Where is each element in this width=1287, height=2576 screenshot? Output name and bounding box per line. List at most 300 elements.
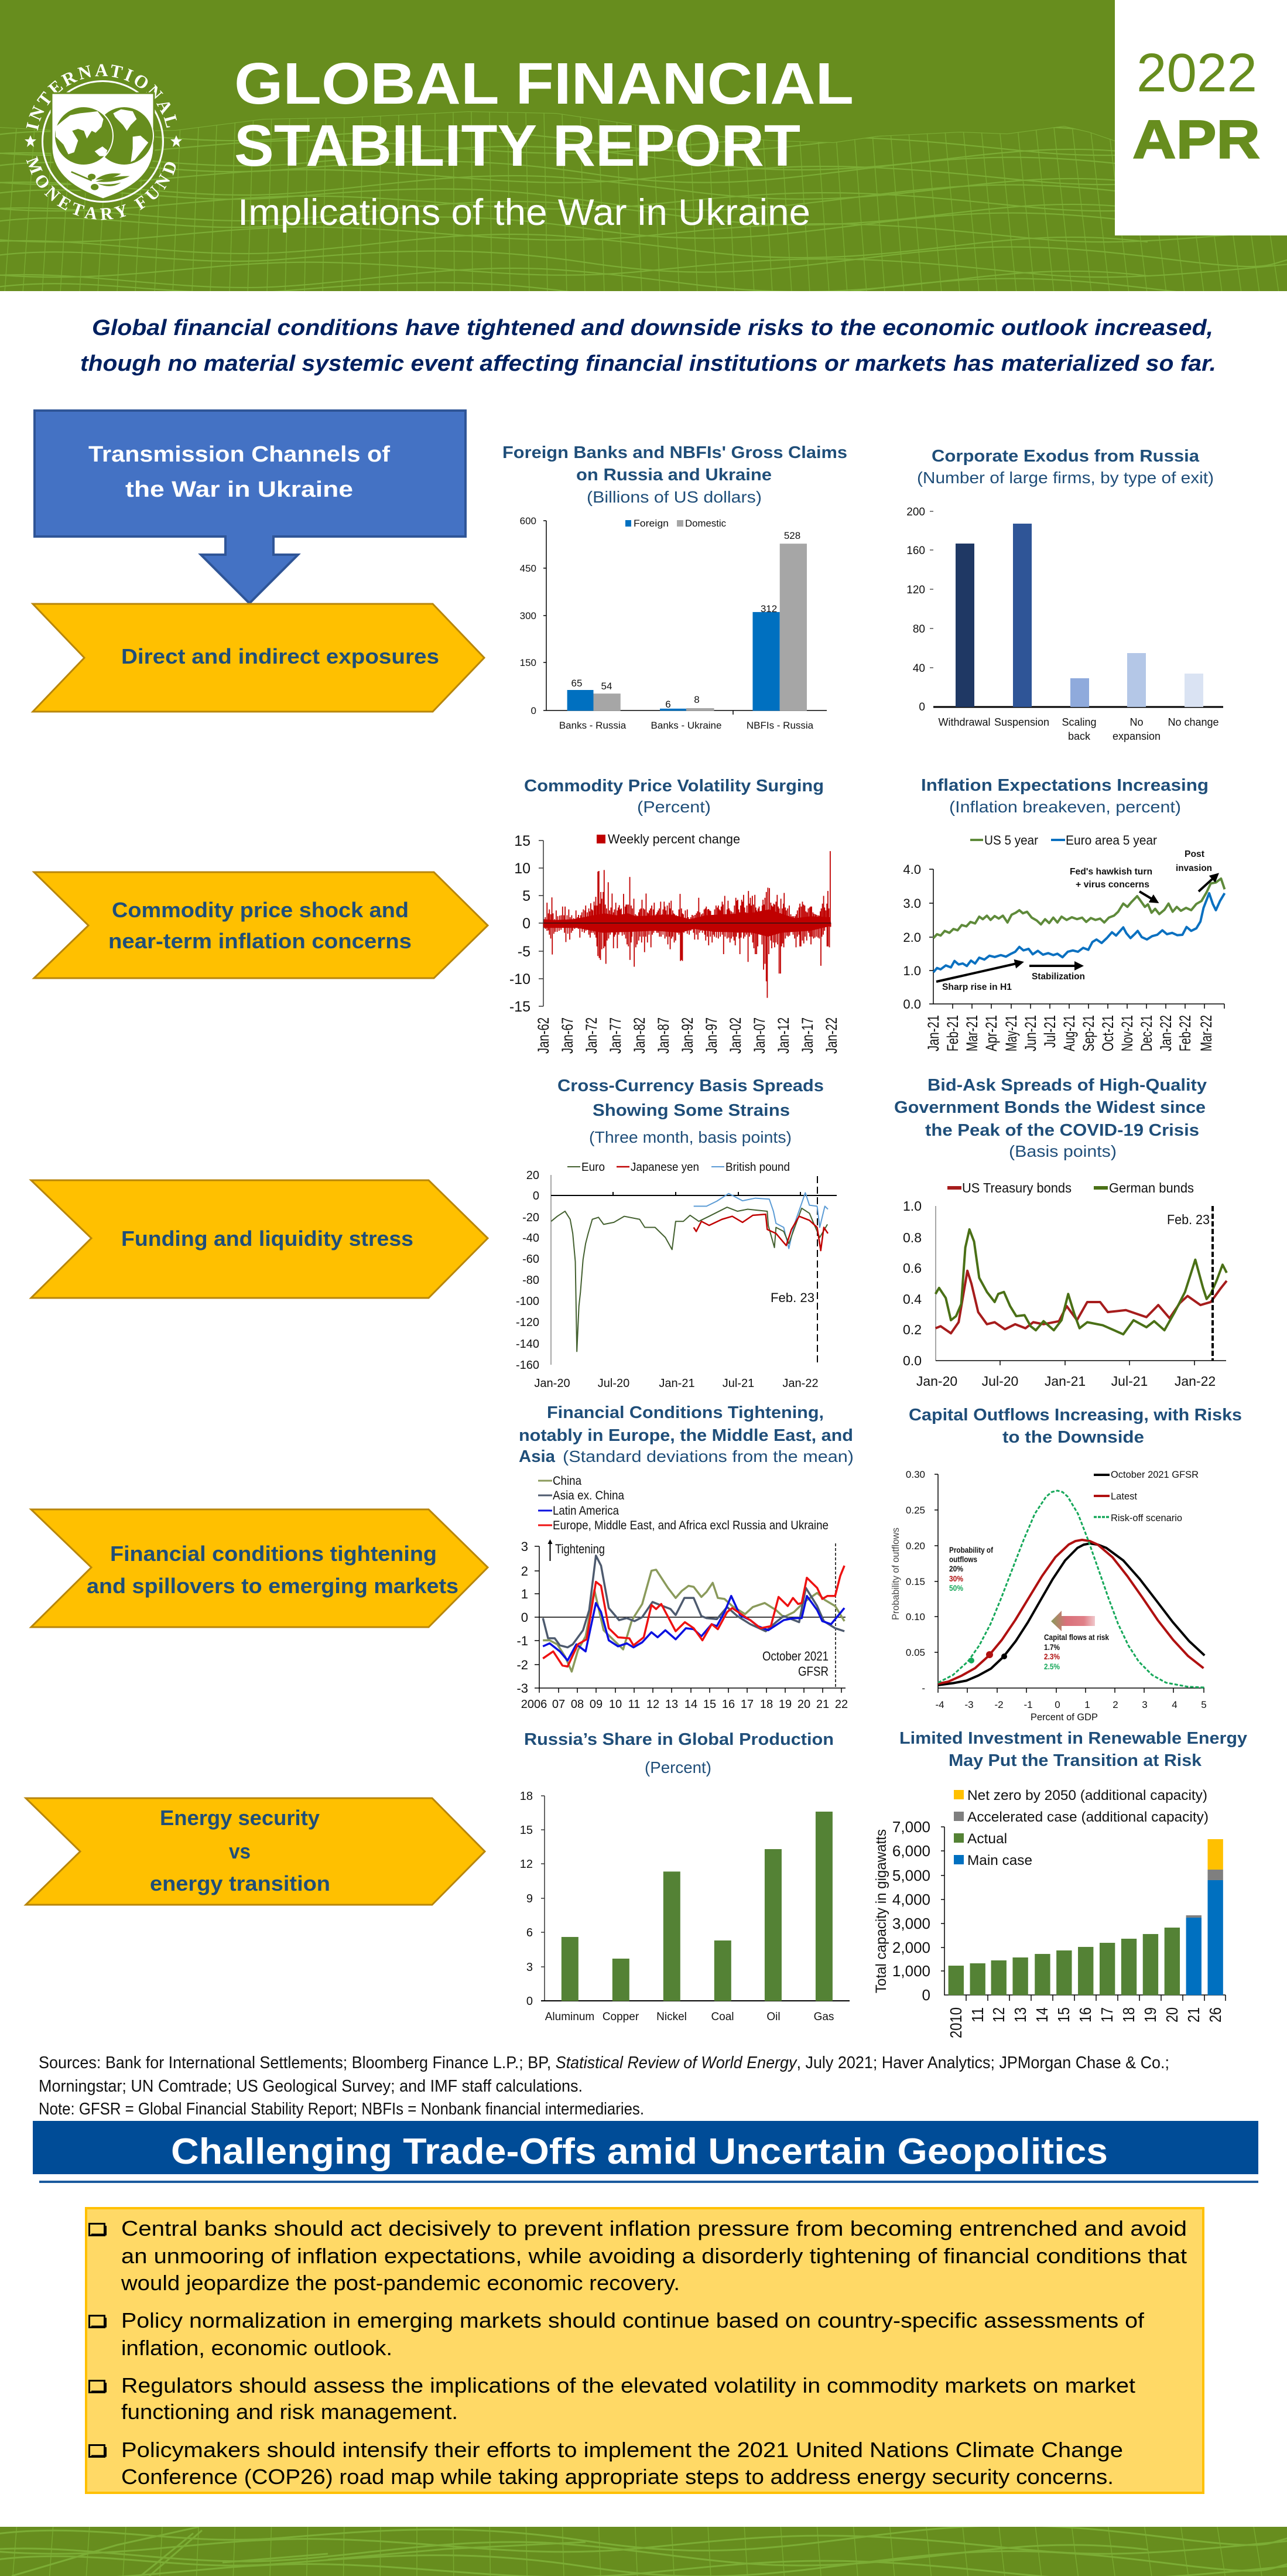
heading: Showing Some Strains — [593, 1101, 790, 1120]
annotations: Sharp rise in H1 — [942, 982, 1012, 992]
annotation: capital flows at risk — [1044, 1632, 1109, 1671]
axis labels: Jan-02 — [727, 1017, 744, 1054]
axis labels: Feb-22 — [1176, 1015, 1194, 1051]
heading — [519, 1403, 854, 1466]
axis labels: 08 — [571, 1698, 584, 1711]
axis labels: Sep-21 — [1080, 1015, 1097, 1051]
legend: Japanese yen — [631, 1161, 699, 1174]
bullet 3 — [89, 2373, 1135, 2424]
axis labels: Jan-92 — [679, 1017, 696, 1054]
legend: China — [553, 1474, 581, 1488]
heading: to the Downside — [1002, 1428, 1144, 1447]
panel: Russia's share — [520, 1730, 850, 2023]
bar chart: Oil — [766, 2011, 781, 2023]
legend: US Treasury bonds — [962, 1180, 1072, 1195]
annotation: probability of outflows: Probability of — [949, 1545, 993, 1555]
axis labels: Jan-67 — [559, 1017, 576, 1054]
tightening arrow: Tightening — [555, 1542, 605, 1556]
axis labels: 16 — [722, 1698, 735, 1711]
channel: financial conditions tightening: and spillovers to emerging markets — [87, 1574, 458, 1598]
stacked bar chart: 4,000 — [892, 1891, 930, 1908]
axis labels — [916, 1374, 1216, 1389]
channel: funding and liquidity stress — [31, 1180, 488, 1298]
line chart: Feb. 23 — [771, 1290, 814, 1305]
stacked bar chart: 6,000 — [892, 1842, 930, 1860]
annotation: capital flows at risk: 1.7% — [1044, 1642, 1060, 1652]
axis labels: 5 — [1201, 1699, 1207, 1710]
channel: funding and liquidity stress: Funding and liquidity stress — [121, 1226, 413, 1251]
heading — [502, 443, 847, 506]
bar chart: No change — [1168, 716, 1219, 728]
heading: (Three month, basis points) — [589, 1128, 792, 1146]
panel: foreign banks claims — [502, 443, 847, 731]
panel: policy recommendations — [86, 2208, 1203, 2493]
line chart: 4.0 — [903, 862, 921, 877]
panel: bid-ask spreads — [894, 1076, 1227, 1389]
stacked bar chart: Total capacity in gigawatts — [873, 1829, 889, 1993]
axis labels: 22 — [835, 1698, 848, 1711]
legend: Accelerated case (additional capacity) — [967, 1809, 1209, 1825]
axis labels: Jan-12 — [775, 1017, 792, 1054]
axis labels: 18 — [760, 1698, 773, 1711]
line chart: -1 — [516, 1634, 528, 1648]
bar chart: Nickel — [656, 2011, 687, 2023]
line chart: -40 — [522, 1232, 539, 1245]
line chart: Feb. 23 — [1167, 1212, 1210, 1227]
channel: direct and indirect exposures: Direct and indirect exposures — [121, 644, 439, 668]
density chart — [890, 1469, 1207, 1723]
bar chart: Banks - Ukraine — [651, 720, 721, 731]
heading — [557, 1077, 824, 1146]
annotations: Stabilization — [1032, 972, 1085, 982]
axis labels: 19 — [779, 1698, 792, 1711]
legend: British pound — [725, 1161, 790, 1174]
axis labels: -3 — [964, 1699, 974, 1710]
line chart: -60 — [522, 1253, 539, 1266]
annotations — [936, 849, 1217, 992]
axis labels: 21 — [1185, 2007, 1203, 2022]
axis labels: Apr-21 — [983, 1015, 1000, 1051]
sources note: Note: GFSR = Global Financial Stability Report; NBFIs = Nonbank financial intermediaries. — [39, 2100, 644, 2119]
axis labels: Jan-21 — [659, 1377, 695, 1390]
line chart: -140 — [516, 1338, 539, 1351]
legend — [970, 833, 1157, 848]
stacked bar chart: 0 — [922, 1986, 930, 2004]
axis labels: Jan-07 — [751, 1017, 768, 1054]
bar chart: 12 — [520, 1858, 533, 1871]
bar chart: weekly percent change: 0 — [522, 915, 530, 932]
intro statement: though no material systemic event affecting financial institutions or markets has materialized so far. — [80, 351, 1216, 376]
annotation: capital flows at risk: Capital flows at risk — [1044, 1632, 1109, 1642]
axis labels: 09 — [590, 1698, 603, 1711]
axis labels: Jan-20 — [534, 1377, 570, 1390]
legend — [1094, 1469, 1199, 1523]
line chart: 3.0 — [903, 896, 921, 911]
bullet 4 — [89, 2438, 1123, 2489]
heading — [917, 447, 1214, 487]
annotation: probability of outflows: 50% — [949, 1583, 963, 1593]
axis labels: 11 — [628, 1698, 640, 1711]
axis labels: 2010 — [947, 2007, 965, 2038]
bar chart: 600 — [520, 515, 536, 527]
axis labels: 14 — [684, 1698, 697, 1711]
channel: energy security vs energy transition: energy transition — [150, 1871, 330, 1895]
bullet 3: functioning and risk management. — [121, 2400, 458, 2424]
heading — [894, 1076, 1207, 1160]
line chart: 0.6 — [903, 1260, 922, 1276]
axis labels: Jan-97 — [703, 1017, 720, 1054]
bar chart: 312 — [761, 603, 777, 614]
bar chart — [906, 506, 1223, 742]
subtitle: Implications of the War in Ukraine — [238, 192, 810, 233]
line chart: 0.0 — [903, 997, 921, 1012]
line chart: -80 — [522, 1274, 539, 1287]
channel: commodity price shock: Commodity price shock and — [112, 898, 409, 922]
bar chart: 9 — [526, 1892, 533, 1905]
bullet 2: inflation, economic outlook. — [121, 2336, 392, 2360]
density chart: 0.10 — [906, 1611, 925, 1622]
channel: energy security vs energy transition: Energy security — [160, 1806, 320, 1830]
bar chart: weekly percent change: -15 — [509, 999, 530, 1015]
axis labels: Jan-22 — [1157, 1015, 1175, 1051]
heading — [524, 1730, 834, 1776]
axis labels: 16 — [1076, 2007, 1094, 2022]
bar chart: weekly percent change: -5 — [518, 944, 530, 960]
axis labels: 2006 — [521, 1698, 547, 1711]
bar chart: 0 — [531, 705, 536, 716]
annotation: probability of outflows: 30% — [949, 1574, 963, 1583]
legend: Latest — [1111, 1491, 1137, 1502]
heading: on Russia and Ukraine — [576, 466, 772, 484]
legend: Actual — [967, 1831, 1007, 1847]
axis labels: Jun-21 — [1022, 1015, 1039, 1051]
arrow: capital flows shift — [1051, 1611, 1095, 1631]
panel: cross-currency basis spreads — [516, 1077, 837, 1390]
bar chart: No — [1129, 716, 1144, 728]
heading — [899, 1729, 1247, 1770]
axis labels: Jan-20 — [916, 1374, 957, 1389]
line chart: 1 — [521, 1587, 528, 1601]
axis labels — [935, 1699, 1207, 1710]
legend: Euro — [581, 1161, 605, 1174]
heading: Russia’s Share in Global Production — [524, 1730, 834, 1749]
annotations: Fed's hawkish turn — [1070, 867, 1152, 877]
axis labels: 2 — [1113, 1699, 1118, 1710]
bar chart: 18 — [520, 1790, 533, 1803]
legend: Europe, Middle East, and Africa excl Russia and Ukraine — [553, 1519, 829, 1532]
axis labels: 15 — [703, 1698, 716, 1711]
heading: Corporate Exodus from Russia — [932, 447, 1200, 466]
axis labels: Oct-21 — [1099, 1015, 1117, 1051]
bar chart: weekly percent change: -10 — [509, 971, 530, 988]
density chart: 0.05 — [906, 1647, 925, 1658]
annotations: invasion — [1176, 863, 1212, 873]
line chart: 1.0 — [903, 964, 921, 978]
heading: Financial Conditions Tightening, — [547, 1403, 824, 1422]
bar chart: weekly percent change: 10 — [514, 860, 530, 877]
heading: (Percent) — [645, 1758, 711, 1776]
bar chart: 8 — [694, 694, 700, 705]
legend: October 2021 GFSR — [1111, 1469, 1199, 1480]
bar chart: Banks - Russia — [559, 720, 627, 731]
axis labels: 20 — [797, 1698, 810, 1711]
axis labels: Feb-21 — [944, 1015, 961, 1051]
heading — [921, 776, 1209, 816]
legend — [567, 1161, 790, 1174]
axis labels — [947, 2007, 1224, 2038]
header banner — [0, 0, 1287, 291]
bullet 4: Conference (COP26) road map while taking appropriate steps to address energy security concerns. — [121, 2465, 1114, 2489]
axis labels: Jul-20 — [598, 1377, 629, 1390]
axis labels: 1 — [1084, 1699, 1090, 1710]
legend — [538, 1474, 829, 1532]
annotation: probability of outflows: outflows — [949, 1555, 977, 1564]
density chart: Percent of GDP — [1031, 1711, 1098, 1723]
legend: Foreign — [634, 518, 669, 529]
axis labels: Jan-72 — [583, 1017, 600, 1054]
date box — [1115, 0, 1287, 235]
axis labels: 07 — [552, 1698, 565, 1711]
density chart: Probability of outflows — [890, 1528, 901, 1620]
axis labels: -2 — [994, 1699, 1004, 1710]
axis labels: Jan-22 — [1175, 1374, 1216, 1389]
tightening arrow — [550, 1540, 605, 1561]
bar chart: Aluminum — [545, 2011, 594, 2023]
axis labels: 17 — [741, 1698, 754, 1711]
bar chart: 6 — [665, 699, 671, 710]
channel: energy security vs energy transition: vs — [229, 1839, 251, 1863]
axis labels: 12 — [646, 1698, 659, 1711]
axis labels: 15 — [1055, 2007, 1073, 2022]
line chart: -100 — [516, 1295, 539, 1308]
line chart: 0.4 — [903, 1292, 922, 1307]
footer band — [0, 2527, 1287, 2576]
legend — [947, 1180, 1194, 1195]
heading: Cross-Currency Basis Spreads — [557, 1077, 824, 1095]
channel: energy security vs energy transition — [26, 1798, 485, 1905]
line chart — [903, 833, 1224, 1051]
panel: inflation expectations — [903, 776, 1224, 1051]
channel: financial conditions tightening: Financial conditions tightening — [110, 1542, 437, 1566]
axis labels: Jan-17 — [799, 1017, 816, 1054]
legend — [625, 518, 726, 529]
line chart: 20 — [526, 1169, 539, 1182]
bar chart: weekly percent change: 15 — [514, 833, 530, 849]
axis labels: 3 — [1142, 1699, 1148, 1710]
bar chart: 40 — [913, 662, 925, 675]
panel: commodity price volatility — [509, 777, 840, 1054]
bar chart: 80 — [913, 623, 925, 636]
line chart — [516, 1474, 848, 1711]
axis labels: Jul-21 — [723, 1377, 754, 1390]
heading: (Inflation breakeven, percent) — [949, 798, 1181, 816]
line chart: -20 — [522, 1211, 539, 1224]
stacked bar chart: 7,000 — [892, 1818, 930, 1836]
annotation: probability of outflows — [949, 1545, 993, 1593]
icon: IMF seal — [25, 64, 182, 220]
line chart: 0 — [521, 1610, 528, 1625]
transmission channels callout with down arrow — [35, 411, 465, 603]
heading: Government Bonds the Widest since — [894, 1098, 1206, 1117]
annotations: + virus concerns — [1076, 880, 1149, 890]
bullet 2 — [89, 2308, 1145, 2360]
bar chart: Withdrawal — [938, 716, 991, 728]
line chart: -160 — [516, 1359, 539, 1372]
bar chart: weekly percent change: 5 — [522, 888, 530, 904]
axis labels: 13 — [1011, 2007, 1029, 2022]
section banner — [33, 2121, 1258, 2183]
axis labels: Jan-62 — [535, 1017, 552, 1054]
panel: renewable energy investment — [873, 1729, 1247, 2038]
line chart: 2.0 — [903, 930, 921, 945]
icon: IMF seal: MONETARY FUND — [26, 156, 176, 220]
heading: notably in Europe, the Middle East, and — [519, 1426, 853, 1445]
axis labels — [925, 1015, 1215, 1051]
axis labels: 13 — [665, 1698, 678, 1711]
axis labels: Jan-22 — [782, 1377, 819, 1390]
legend: Asia ex. China — [553, 1489, 624, 1502]
bullet 1 — [89, 2216, 1187, 2295]
date box: APR — [1132, 109, 1260, 170]
axis labels: Jan-77 — [607, 1017, 624, 1054]
heading: Commodity Price Volatility Surging — [524, 777, 824, 795]
line chart: 2 — [521, 1564, 528, 1579]
bar chart: Copper — [603, 2011, 639, 2023]
annotation: probability of outflows: 20% — [949, 1564, 963, 1573]
axis labels: 14 — [1033, 2007, 1051, 2022]
density chart: 0.15 — [906, 1576, 925, 1587]
density chart: 0.30 — [906, 1469, 925, 1480]
stacked bar chart — [873, 1788, 1226, 2038]
legend: Net zero by 2050 (additional capacity) — [967, 1788, 1207, 1803]
bar chart: 528 — [784, 530, 800, 541]
axis labels: 11 — [968, 2007, 987, 2022]
panel: financial conditions — [516, 1403, 854, 1711]
channel: commodity price shock: near-term inflation concerns — [108, 929, 412, 953]
annotation: capital flows at risk: 2.5% — [1044, 1662, 1060, 1671]
axis labels: 0 — [1055, 1699, 1060, 1710]
icon: IMF seal: INTERNATIONAL — [26, 64, 177, 131]
axis labels: Dec-21 — [1138, 1015, 1155, 1051]
axis labels: Mar-21 — [963, 1015, 981, 1051]
axis labels: 20 — [1163, 2007, 1181, 2022]
axis labels: Jan-82 — [631, 1017, 648, 1054]
axis labels: -1 — [1024, 1699, 1033, 1710]
bar chart: back — [1068, 730, 1091, 742]
axis labels: Jan-22 — [823, 1017, 840, 1054]
axis labels — [521, 1698, 848, 1711]
panel: corporate exodus — [906, 447, 1223, 742]
bullet 1: would jeopardize the post-pandemic economic recovery. — [121, 2271, 680, 2295]
axis labels: Nov-21 — [1118, 1015, 1136, 1051]
annotation: capital flows at risk: 2.3% — [1044, 1652, 1060, 1661]
bar chart: 120 — [906, 584, 925, 596]
heading: (Standard deviations from the mean) — [563, 1447, 854, 1465]
heading — [524, 777, 824, 816]
heading: May Put the Transition at Risk — [949, 1751, 1202, 1770]
axis labels: Jan-87 — [655, 1017, 672, 1054]
legend: Risk-off scenario — [1111, 1512, 1182, 1523]
intro statement: Global financial conditions have tightened and downside risks to the economic outlook increased, — [92, 316, 1213, 340]
bar chart: Suspension — [994, 716, 1049, 728]
line chart: -120 — [516, 1316, 539, 1329]
bar chart: 200 — [906, 506, 925, 518]
channel: commodity price shock — [34, 872, 488, 978]
line chart: 0 — [533, 1190, 539, 1202]
legend: Euro area 5 year — [1066, 833, 1157, 848]
heading: (Billions of US dollars) — [587, 488, 762, 506]
date box: 2022 — [1137, 42, 1257, 103]
stacked bar chart: 1,000 — [892, 1962, 930, 1980]
axis labels: Aug-21 — [1060, 1015, 1078, 1051]
title: STABILITY REPORT — [234, 113, 800, 179]
heading: (Number of large firms, by type of exit) — [917, 469, 1214, 487]
axis labels: Jul-21 — [1111, 1374, 1148, 1389]
bar chart: Gas — [814, 2011, 834, 2023]
bar chart: 3 — [526, 1961, 533, 1974]
line chart: -3 — [516, 1681, 528, 1696]
axis labels: Jul-21 — [1041, 1015, 1059, 1048]
axis labels — [535, 1017, 840, 1054]
axis labels: Jul-20 — [982, 1374, 1018, 1389]
bullet 1: an unmooring of inflation expectations, while avoiding a disorderly tightening of financial conditions that — [121, 2244, 1187, 2268]
axis labels: 26 — [1206, 2007, 1224, 2022]
line chart: 0.0 — [903, 1353, 922, 1368]
bar chart: Coal — [711, 2011, 734, 2023]
stacked bar chart: 3,000 — [892, 1915, 930, 1932]
axis labels: 17 — [1098, 2007, 1116, 2022]
line chart — [516, 1161, 837, 1390]
intro statement — [80, 316, 1216, 376]
axis labels: 19 — [1141, 2007, 1159, 2022]
density chart: - — [922, 1683, 925, 1694]
axis labels: Mar-22 — [1197, 1015, 1215, 1051]
bar chart: 0 — [526, 1995, 533, 2008]
heading: Capital Outflows Increasing, with Risks — [909, 1406, 1242, 1424]
stacked bar chart: 2,000 — [892, 1939, 930, 1956]
bar chart: expansion — [1113, 730, 1161, 742]
heading: (Basis points) — [1009, 1142, 1117, 1160]
bar chart: 15 — [520, 1824, 533, 1837]
line chart: GFSR — [798, 1664, 829, 1679]
axis labels: May-21 — [1002, 1015, 1020, 1051]
sources note: Morningstar; UN Comtrade; US Geological Survey; and IMF staff calculations. — [39, 2077, 583, 2096]
axis labels: 12 — [990, 2007, 1008, 2022]
bar chart: 150 — [520, 657, 536, 668]
legend: Weekly percent change — [608, 832, 740, 846]
bar chart: NBFIs - Russia — [747, 720, 814, 731]
bar chart: 300 — [520, 610, 536, 621]
heading: the Peak of the COVID-19 Crisis — [925, 1121, 1199, 1140]
bar chart: 54 — [601, 681, 612, 692]
bar chart: 450 — [520, 563, 536, 574]
stacked bar chart: 5,000 — [892, 1867, 930, 1884]
line chart: 3 — [521, 1539, 528, 1554]
axis labels: -4 — [935, 1699, 944, 1710]
channel: financial conditions tightening — [31, 1509, 488, 1627]
line chart — [903, 1180, 1227, 1389]
bar chart: Scaling — [1062, 716, 1097, 728]
density chart: 0.25 — [906, 1505, 925, 1516]
line chart: October 2021 — [762, 1649, 829, 1663]
heading: Foreign Banks and NBFIs' Gross Claims — [502, 443, 847, 462]
bullet 4: Policymakers should intensify their efforts to implement the 2021 United Nations Climate Change — [121, 2438, 1123, 2462]
heading — [909, 1406, 1242, 1447]
heading: Inflation Expectations Increasing — [921, 776, 1209, 795]
legend: Latin America — [553, 1504, 619, 1518]
axis labels — [534, 1377, 819, 1390]
title — [234, 51, 854, 179]
